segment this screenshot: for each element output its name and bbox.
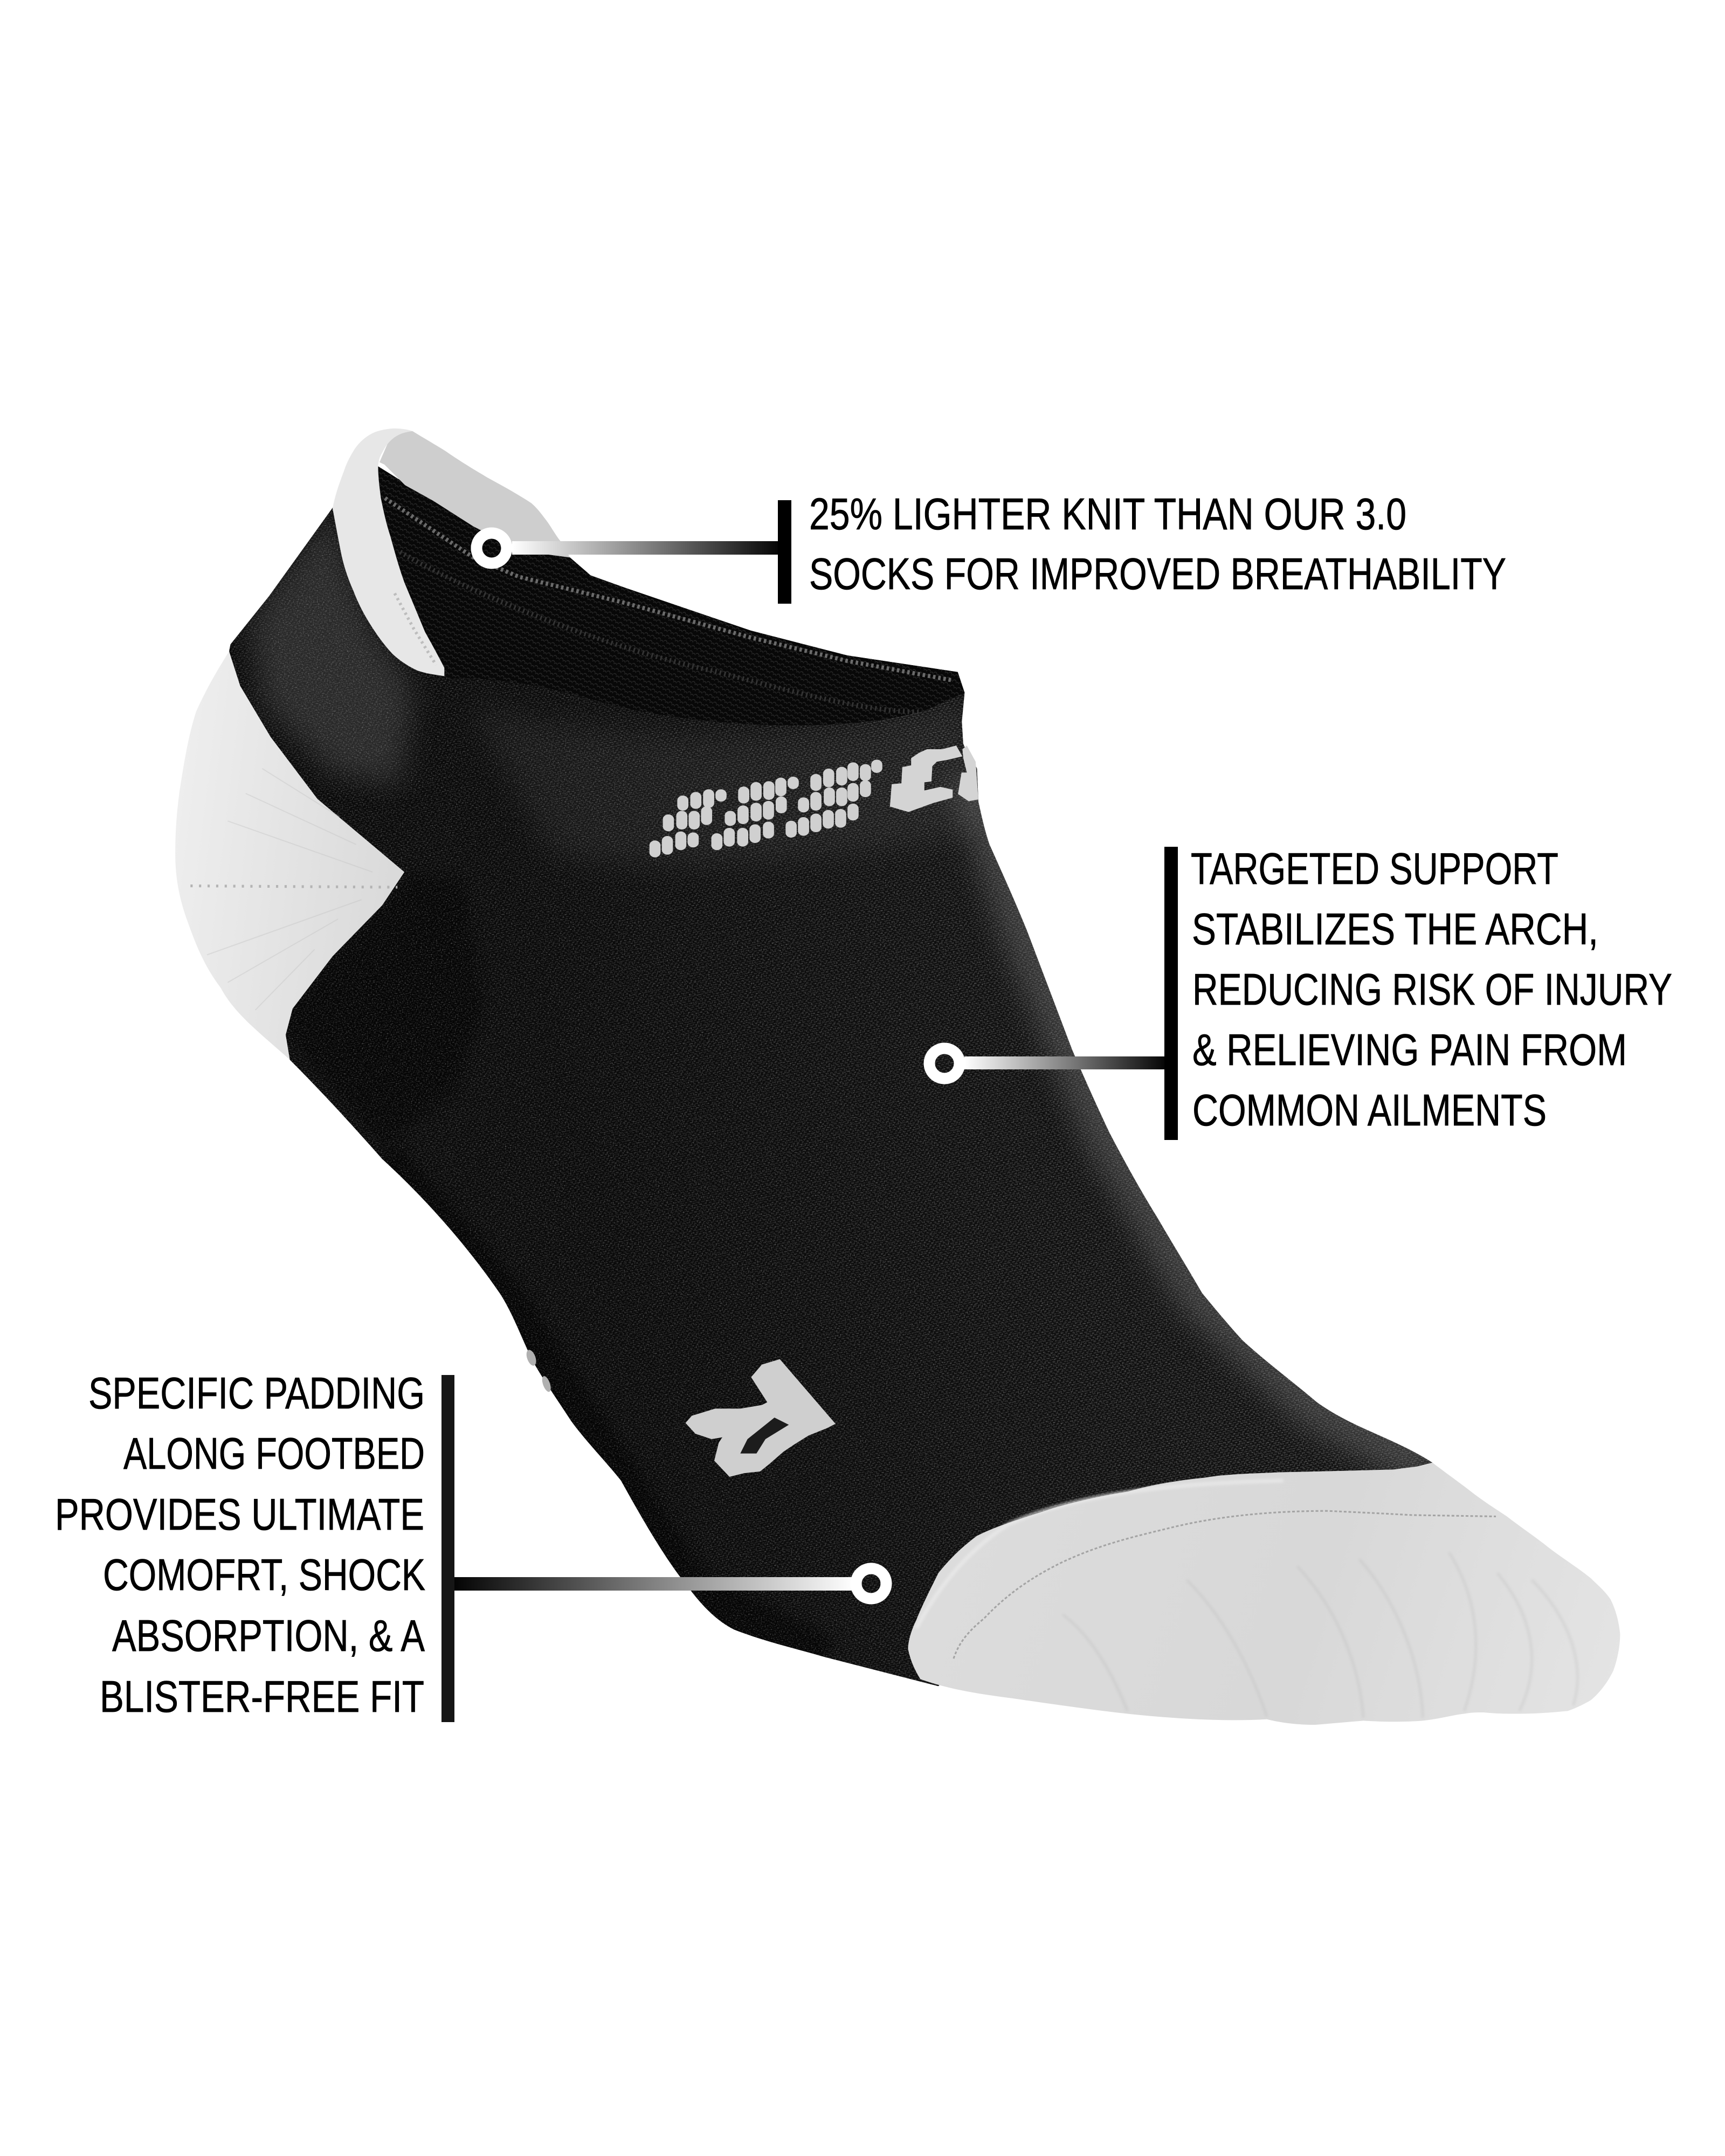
callout text: ABSORPTION, & A [112,1611,425,1661]
marker dot [929,1048,960,1079]
callout text: SOCKS FOR IMPROVED BREATHABILITY [809,549,1506,599]
rim stitch line [385,498,952,680]
cuff lighter band [494,717,967,859]
callout: lighter knit [477,489,1506,604]
callout text [55,1368,425,1722]
knitted R mark [686,1359,836,1477]
callout text: COMMON AILMENTS [1192,1085,1547,1135]
callout text: & RELIEVING PAIN FROM [1192,1025,1627,1075]
heel knit chevrons [207,769,372,1010]
sole edge shadow [382,1159,825,1657]
collar opening [378,466,964,725]
callout: arch support [929,844,1672,1140]
illustration: no-show sock [175,429,1620,1725]
infographic canvas [58,429,1672,1725]
inner knit [378,466,964,725]
knitted brand mark: wings [655,764,877,853]
callout text: TARGETED SUPPORT [1191,844,1558,894]
marker dot [477,533,507,563]
callout text [1191,844,1672,1135]
inner seam [400,552,922,712]
callout: footbed padding [55,1368,886,1722]
padded heel dark zone [286,872,483,1145]
tab inner face [380,431,570,557]
callout text: PROVIDES ULTIMATE [55,1489,424,1539]
marker dot [856,1568,886,1599]
toe ridges [1062,1552,1577,1718]
heel seam [190,886,397,887]
sock body [229,466,1432,1686]
connector line [512,541,784,555]
callout text: COMOFRT, SHOCK [103,1550,425,1600]
callout text: STABILIZES THE ARCH, [1192,904,1598,954]
knitted brand mark: C and edge fragment [890,745,978,812]
back tab [333,429,570,676]
rim stitching [395,593,436,665]
callout text: ALONG FOOTBED [123,1428,425,1478]
connector line [447,1577,854,1591]
callout text: SPECIFIC PADDING [88,1368,425,1418]
callout text: BLISTER-FREE FIT [100,1671,424,1722]
callout text: 25% LIGHTER KNIT THAN OUR 3.0 [809,489,1406,539]
callout bar [1164,847,1178,1140]
callout text [809,489,1506,599]
sole padding marks [525,1349,553,1393]
heel patch [175,651,404,1060]
right edge highlight [974,773,1432,1466]
connector line [964,1056,1170,1069]
toe rim highlight [916,1481,1284,1628]
toe cap [908,1463,1620,1725]
knit speckle [229,468,1432,1685]
callout bar [778,500,791,604]
upper heel lighter knit [249,508,414,786]
toe seam [954,1511,1496,1659]
tab white rim [333,429,444,676]
callout bar [441,1375,454,1722]
